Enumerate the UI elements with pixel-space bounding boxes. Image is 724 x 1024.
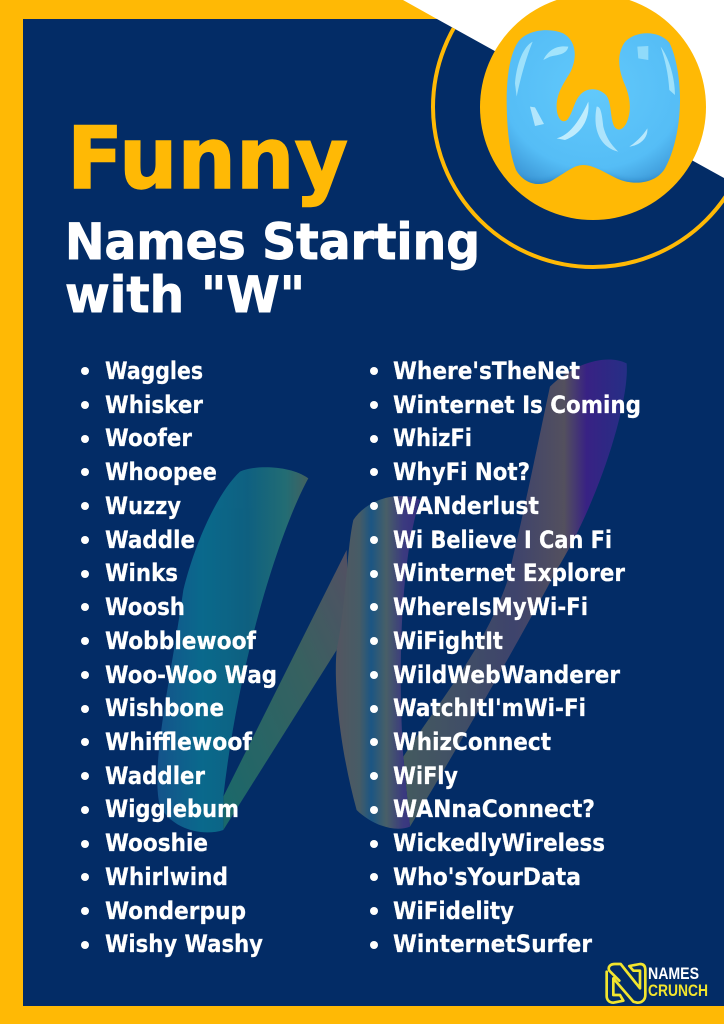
- right name list: Who'sYourData: [393, 863, 581, 891]
- right name list: WhereIsMyWi-Fi: [393, 593, 588, 621]
- subtitle: [65, 213, 480, 324]
- right name list: WildWebWanderer: [393, 661, 620, 689]
- right name list: WhyFi Not?: [393, 458, 530, 486]
- gold ring around badge: [433, 0, 724, 267]
- right name list: Wi Believe I Can Fi: [393, 526, 612, 554]
- logo: Names Crunch: [607, 964, 708, 1003]
- left name list: Woosh: [105, 593, 185, 621]
- right name list: Winternet Is Coming: [393, 391, 641, 419]
- right name list: [370, 357, 641, 958]
- left name list: Whirlwind: [105, 863, 228, 891]
- left name list: Wishy Washy: [105, 930, 263, 958]
- right name list: WatchItI'mWi-Fi: [393, 694, 586, 722]
- logo wordmark: CRUNCH: [648, 981, 708, 1000]
- gold circle badge: [480, 0, 706, 220]
- right name list: Where'sTheNet: [393, 357, 580, 385]
- left name list: Waggles: [105, 357, 203, 385]
- right name list: WANnaConnect?: [393, 795, 595, 823]
- left name list: Wuzzy: [105, 492, 181, 520]
- left name list: Woofer: [105, 424, 192, 452]
- right name list: WickedlyWireless: [393, 829, 605, 857]
- subtitle: Names Starting: [65, 213, 480, 271]
- title: Funny: Funny: [67, 109, 348, 209]
- right name list: Winternet Explorer: [393, 559, 625, 587]
- right name list: WhizFi: [393, 424, 472, 452]
- left name list: Winks: [105, 559, 178, 587]
- left name list: Wooshie: [105, 829, 208, 857]
- left name list: [81, 357, 277, 958]
- icon: N logo mark: [607, 964, 645, 1003]
- right name list: WhizConnect: [393, 728, 551, 756]
- logo wordmark: NAMES: [648, 964, 699, 983]
- left name list: Whifflewoof: [105, 728, 253, 756]
- right name list: WiFidelity: [393, 897, 514, 925]
- left name list: Wobblewoof: [105, 627, 257, 655]
- left name list: Waddle: [105, 526, 195, 554]
- icon: glossy blue balloon W: [507, 30, 680, 190]
- decorative brush W watermark: [157, 359, 627, 832]
- left name list: Wigglebum: [105, 795, 239, 823]
- subtitle: with "W": [65, 266, 305, 324]
- left name list: Woo-Woo Wag: [105, 661, 277, 689]
- right name list: WiFly: [393, 762, 458, 790]
- left name list: Waddler: [105, 762, 205, 790]
- right name list: WinternetSurfer: [393, 930, 592, 958]
- left name list: Whoopee: [105, 458, 217, 486]
- right name list: WANderlust: [393, 492, 539, 520]
- right name list: WiFightIt: [393, 627, 503, 655]
- left name list: Wishbone: [105, 694, 224, 722]
- left name list: Whisker: [105, 391, 203, 419]
- logo wordmark: [648, 964, 708, 1000]
- left name list: Wonderpup: [105, 897, 246, 925]
